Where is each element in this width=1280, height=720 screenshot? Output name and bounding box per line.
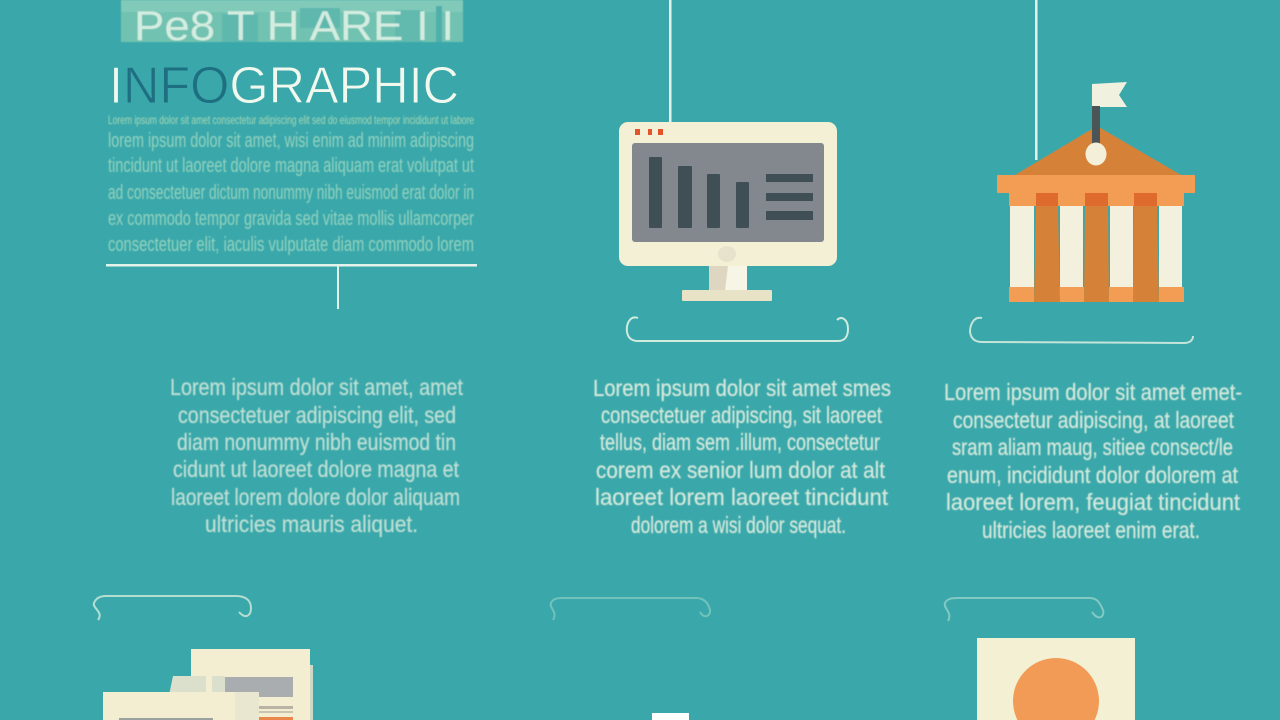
text block: middle column bbox=[593, 375, 891, 538]
text block: left column bbox=[170, 374, 464, 537]
bracket above center icon bbox=[551, 598, 710, 620]
intro text block: ex commodo tempor gravida sed vitae mollis ullamcorper bbox=[108, 208, 474, 230]
text block: middle column: consectetuer adipiscing, sit laoreet bbox=[601, 402, 882, 428]
title: INFOGRAPHIC: INFOGRAPHIC bbox=[109, 57, 459, 115]
icon: monitor with bar chart bbox=[619, 122, 837, 301]
text block: right column: ultricies laoreet enim erat. bbox=[982, 517, 1200, 543]
intro text block: ad consectetuer dictum nonummy nibh euismod erat dolor in bbox=[108, 182, 474, 204]
icon: stacked documents bbox=[103, 649, 313, 720]
bracket above poster bbox=[945, 598, 1103, 621]
text block: middle column: dolorem a wisi dolor sequat. bbox=[631, 512, 846, 538]
text block: middle column: laoreet lorem laoreet tincidunt bbox=[595, 484, 889, 510]
text block: middle column: Lorem ipsum dolor sit amet smes bbox=[593, 375, 891, 401]
text block: left column: diam nonummy nibh euismod tin bbox=[177, 429, 456, 455]
header banner: garbled title: Pe8 T H ARE I I bbox=[134, 2, 454, 49]
text block: right column: consectetur adipiscing, at laoreet bbox=[953, 407, 1234, 433]
text block: middle column: corem ex senior lum dolor at alt bbox=[596, 457, 886, 483]
icon: center white tab bbox=[652, 713, 689, 720]
text block: left column: ultricies mauris aliquet. bbox=[205, 511, 418, 537]
header rule with connector bbox=[106, 264, 477, 309]
bracket above documents bbox=[94, 596, 251, 620]
intro text block: Lorem ipsum dolor sit amet consectetur adipiscing elit sed do eiusmod tempor incididunt ut labore bbox=[108, 113, 474, 127]
text block: middle column: tellus, diam sem .illum, consectetur bbox=[600, 429, 880, 455]
hanging line: building bbox=[1035, 0, 1038, 160]
text block: right column bbox=[944, 379, 1242, 543]
icon: building with flag bbox=[997, 82, 1195, 302]
intro text block bbox=[108, 113, 474, 256]
text block: left column: consectetuer adipiscing elit, sed bbox=[178, 402, 456, 428]
intro text block: tincidunt ut laoreet dolore magna aliquam erat volutpat ut bbox=[108, 155, 474, 177]
text block: right column: laoreet lorem, feugiat tincidunt bbox=[946, 489, 1241, 515]
hanging line: monitor bbox=[669, 0, 672, 123]
bracket under building bbox=[970, 318, 1193, 343]
icon: poster with orange circle bbox=[977, 638, 1135, 720]
text block: left column: Lorem ipsum dolor sit amet, amet bbox=[170, 374, 464, 400]
text block: left column: cidunt ut laoreet dolore magna et bbox=[173, 456, 460, 482]
bracket under monitor bbox=[627, 317, 848, 341]
text block: left column: laoreet lorem dolore dolor aliquam bbox=[171, 484, 460, 510]
text block: right column: Lorem ipsum dolor sit amet emet- bbox=[944, 379, 1242, 405]
intro text block: consectetuer elit, iaculis vulputate diam commodo lorem bbox=[108, 234, 474, 256]
text block: right column: enum, incididunt dolor dolorem at bbox=[947, 462, 1239, 488]
intro text block: lorem ipsum dolor sit amet, wisi enim ad minim adipiscing bbox=[108, 130, 474, 152]
